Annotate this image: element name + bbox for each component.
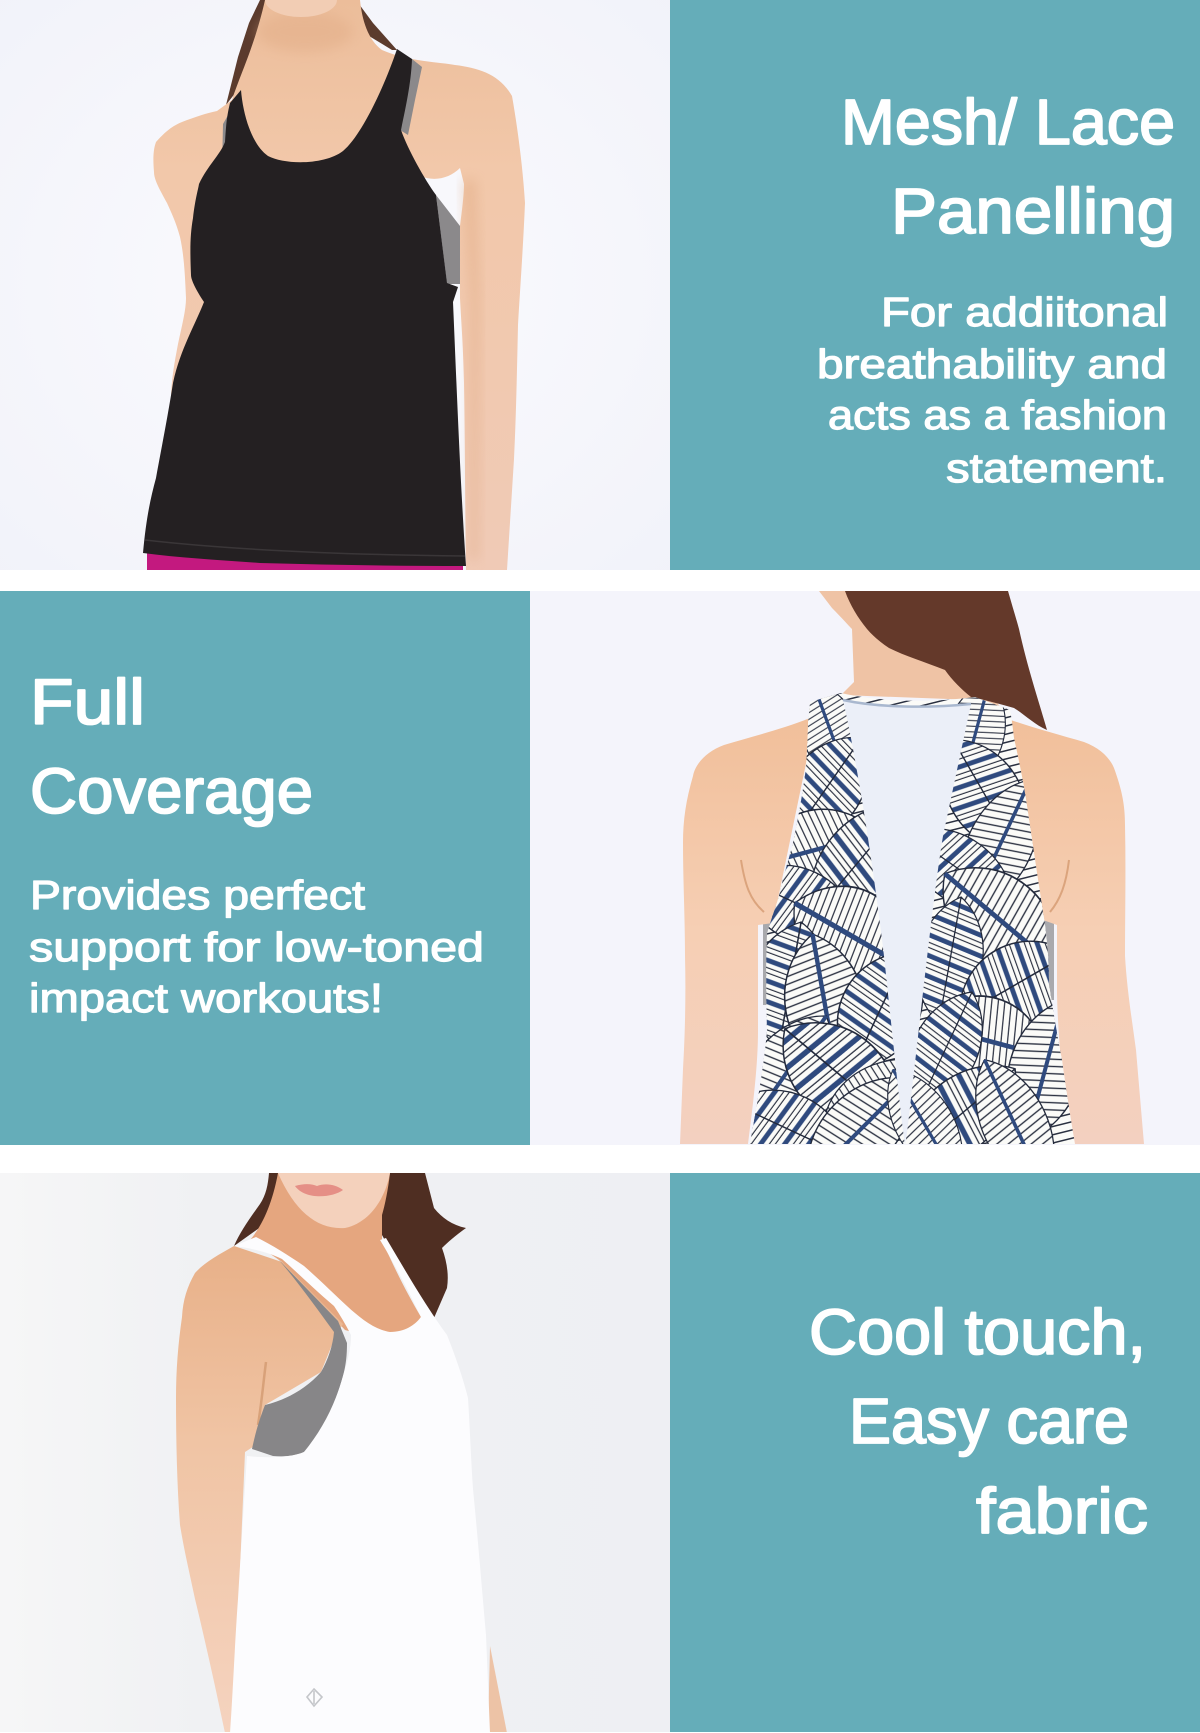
description: statement. (946, 445, 1167, 491)
grey sports bra (222, 59, 460, 284)
heading (809, 1296, 1148, 1547)
small far arm (488, 1646, 507, 1733)
neck and chest skin (250, 1173, 421, 1345)
right arm and shoulder (1000, 718, 1144, 1144)
mesh neckline stitch (843, 700, 971, 707)
description: Provides perfect (30, 872, 366, 918)
heading: Full (30, 666, 145, 738)
hair strands (226, 0, 397, 105)
grey sports bra (252, 1259, 347, 1456)
description (817, 289, 1168, 491)
model skin (153, 0, 525, 570)
neck (819, 591, 1000, 706)
arm shading (462, 180, 480, 560)
heading (841, 86, 1175, 247)
white mesh panel (843, 700, 971, 1145)
hair (845, 591, 1047, 730)
panel: cool touch photo (0, 1173, 670, 1733)
panel: mesh lace panelling text card (670, 0, 1200, 570)
lower face (278, 1173, 390, 1228)
heading: Coverage (30, 755, 313, 827)
printed tank top (750, 693, 1075, 1144)
heading: Cool touch, (809, 1296, 1146, 1368)
hair (234, 1173, 466, 1318)
leaf print (750, 694, 1069, 1144)
black tank top (143, 49, 466, 566)
arm crease (258, 1362, 266, 1425)
description (29, 872, 484, 1021)
description: breathability and (817, 341, 1167, 387)
white tank top (230, 1237, 490, 1733)
heading: fabric (976, 1475, 1148, 1547)
neck shadow (252, 16, 348, 50)
panel: cool touch text card (670, 1173, 1200, 1732)
description: For addiitonal (881, 289, 1168, 335)
panel: full coverage text card (0, 591, 530, 1145)
description: impact workouts! (29, 975, 383, 1021)
heading: Panelling (891, 175, 1175, 247)
logo diamond (307, 1689, 322, 1706)
pink leggings (147, 554, 463, 570)
left arm and shoulder (680, 718, 815, 1144)
panel: mesh lace panelling photo (0, 0, 670, 570)
description: acts as a fashion (828, 392, 1167, 438)
shoulder and arm skin (176, 1246, 343, 1733)
panel: full coverage back view photo (530, 591, 1200, 1206)
heading (30, 666, 313, 827)
armpit creases (741, 860, 1069, 912)
heading: Mesh/ Lace (841, 86, 1175, 158)
heading: Easy care (849, 1385, 1129, 1457)
chin (265, 0, 337, 17)
lips (295, 1184, 343, 1196)
hem stitch (145, 540, 465, 556)
description: support for low-toned (29, 924, 484, 970)
grey bra edges (763, 916, 1054, 1005)
